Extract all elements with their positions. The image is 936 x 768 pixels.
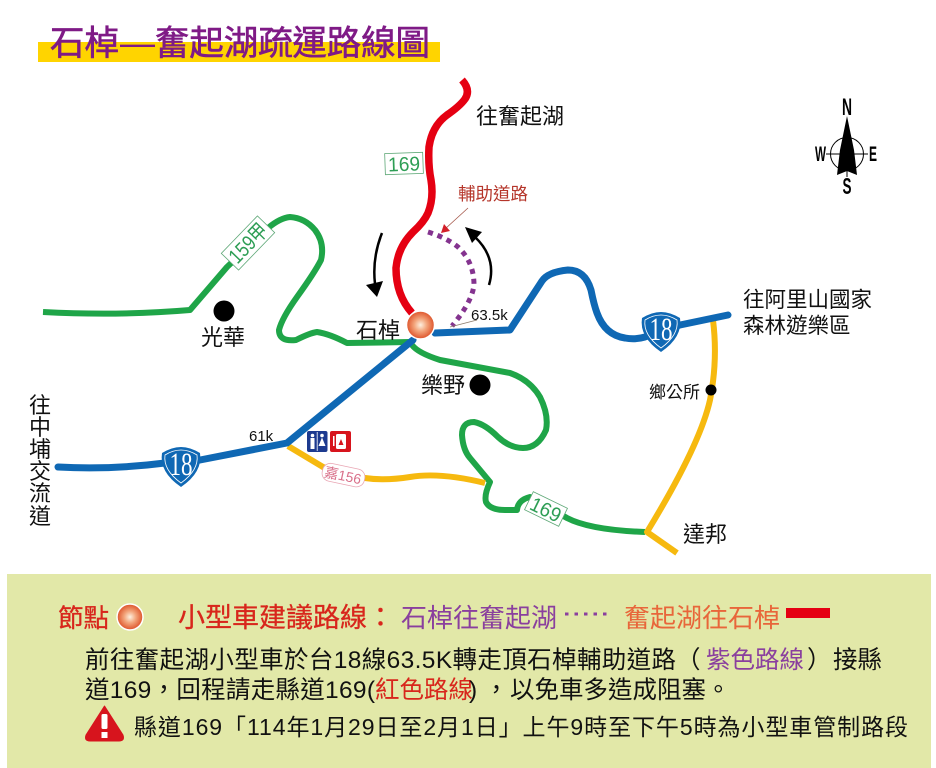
highway shield: 18 west [162, 447, 200, 487]
place: 樂野 [421, 373, 490, 398]
legend: red line sample [786, 608, 830, 618]
label: 往中埔交流道: 流 [29, 481, 51, 506]
label: 往中埔交流道: 道 [29, 504, 51, 529]
title: 奮起湖疏運路線圖 [155, 25, 430, 63]
road: blue 18 east [435, 270, 728, 339]
legend: 小型車建議路線: 小型車建議路線： [178, 603, 394, 633]
label: 61k: 61k [249, 428, 274, 445]
title: — [120, 24, 155, 63]
place: 光華 [201, 300, 245, 350]
road: red return route [396, 80, 467, 313]
road: green 159甲 [43, 217, 410, 343]
highway shield: 18 east [642, 312, 680, 352]
note: second line: 以免車多造成阻塞。 [510, 676, 730, 704]
legend: red route text: 奮起湖往石棹 [624, 603, 780, 633]
icon: warning triangle [86, 706, 124, 741]
title [38, 24, 440, 63]
road sign: 169 north: 169 [388, 153, 420, 177]
panel: legend and notes [7, 574, 931, 768]
title: 石棹 [50, 25, 119, 63]
note: second line: ， [484, 677, 508, 704]
icon: restroom [307, 431, 328, 452]
icon: fuel [330, 431, 351, 452]
label: 往中埔交流道: 往 [29, 393, 51, 418]
note: second line: 道169，回程請走縣道169( [85, 676, 376, 704]
label: 往中埔交流道 [29, 393, 51, 529]
compass [815, 94, 877, 199]
road sign: 嘉156: 嘉156 [323, 464, 363, 487]
place: 鄉公所: 鄉公所 [649, 383, 700, 402]
label: 往阿里山國家森林遊樂區: 森林遊樂區 [743, 314, 851, 338]
label: 往阿里山國家森林遊樂區: 往阿里山國家 [743, 288, 872, 312]
label: 往奮起湖: 往奮起湖 [476, 104, 564, 129]
road: blue 18 west [58, 340, 413, 468]
road sign: 169 south: 169 [526, 493, 565, 527]
note: first line: ） [807, 646, 832, 674]
road: yellow 嘉156 [288, 446, 485, 483]
compass: N [842, 94, 852, 121]
road: yellow east [647, 320, 715, 553]
highway shield: 18 east: 18 [650, 312, 672, 348]
arrow: direction down [366, 233, 383, 297]
compass: W [815, 143, 826, 166]
label: 往中埔交流道: 埔 [29, 437, 51, 462]
label: 石棹: 石棹 [356, 318, 400, 343]
label: 輔助道路: 輔助道路 [458, 184, 528, 204]
road sign: 159甲: 159甲 [224, 219, 273, 268]
legend: 節點: 節點 [58, 605, 109, 633]
arrow: direction up [465, 227, 491, 285]
note: second line: ) [469, 677, 477, 704]
arrow: 輔助道路 pointer [441, 208, 468, 233]
node: 石棹 [406, 311, 434, 339]
place: 光華: 光華 [201, 325, 245, 350]
legend: purple dotted sample [565, 612, 610, 616]
place: 樂野: 樂野 [421, 373, 465, 398]
note: second line: 紅色路線 [375, 676, 473, 704]
legend: node icon [117, 604, 143, 630]
label: 達邦: 達邦 [683, 522, 727, 547]
note: first line: 前往奮起湖小型車於台18線63.5K轉走頂石棹輔助道路 [85, 646, 676, 674]
note: first line: 紫色路線 [706, 646, 804, 674]
label: 往中埔交流道: 交 [29, 459, 51, 484]
note: first line: 接縣 [833, 646, 882, 674]
road: purple auxiliary route [428, 232, 474, 326]
highway shield: 18 west: 18 [170, 447, 192, 483]
road: green 169 south [412, 345, 645, 532]
leader line: 63.5k [450, 320, 477, 327]
compass: E [869, 143, 877, 166]
note: control period: 縣道169「114年1月29日至2月1日」上午9時至下午5時為小型車管制路段 [134, 714, 908, 740]
note: first line: （ [676, 646, 700, 674]
label: 往阿里山國家森林遊樂區 [743, 288, 872, 338]
legend: purple route text: 石棹往奮起湖 [401, 603, 557, 633]
compass: S [842, 173, 852, 199]
label: 往中埔交流道: 中 [29, 415, 51, 440]
label: 63.5k: 63.5k [471, 307, 508, 324]
